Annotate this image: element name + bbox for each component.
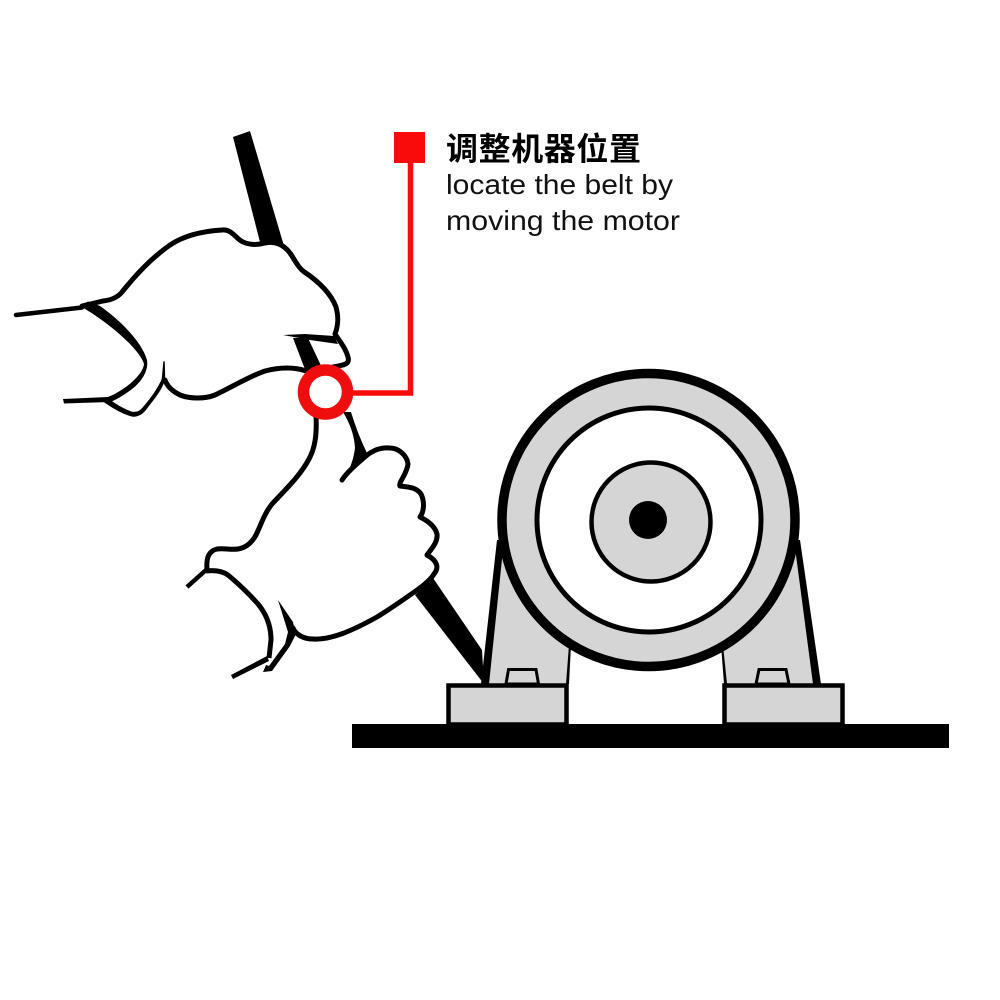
right mount leg xyxy=(722,540,817,684)
motor inner white circle xyxy=(537,408,761,632)
callout text xyxy=(446,131,680,236)
left leg outlines xyxy=(481,540,571,684)
upper sleeve line xyxy=(16,308,82,315)
English description line 1: locate the belt by xyxy=(446,169,673,200)
lower cuff folded edge xyxy=(263,600,296,672)
upper thumb tip line xyxy=(283,334,338,344)
red callout connector xyxy=(304,132,425,414)
ground bar xyxy=(352,724,949,748)
lower sleeve bottom line xyxy=(231,656,269,679)
upper hand glove fill xyxy=(82,230,348,416)
lower wrist cuff edge xyxy=(206,571,271,658)
belt passing through grip xyxy=(293,338,324,372)
red ring marker xyxy=(304,370,348,414)
upper cuff wedge xyxy=(63,302,147,404)
motor hub xyxy=(592,462,710,582)
lower wrist line xyxy=(187,570,206,587)
lower hand glove fill xyxy=(207,415,437,660)
left bolt xyxy=(506,670,538,684)
right bolt xyxy=(756,670,789,684)
English description line 2: moving the motor xyxy=(446,205,680,236)
upper hand lower edge xyxy=(165,368,306,398)
right base block xyxy=(724,686,842,724)
lower fist outline xyxy=(293,448,437,639)
lower hand outline xyxy=(207,415,316,570)
motor outer ring xyxy=(502,374,795,666)
upper cuff folded edge xyxy=(105,362,164,416)
motor assembly xyxy=(448,374,842,724)
motor shaft xyxy=(629,501,667,539)
belt: upper section xyxy=(233,131,284,246)
upper hand outline xyxy=(82,230,348,367)
belt: lower section xyxy=(415,578,484,684)
belt wedge beside thumb xyxy=(343,412,367,481)
left base block xyxy=(448,686,566,724)
red leader line xyxy=(350,163,410,393)
left mount leg xyxy=(484,540,570,684)
red square marker xyxy=(394,132,425,163)
upper hand xyxy=(16,230,348,416)
lower hand xyxy=(187,412,437,679)
right leg outlines xyxy=(721,540,821,684)
Chinese heading: 调整机器位置 xyxy=(446,131,641,167)
